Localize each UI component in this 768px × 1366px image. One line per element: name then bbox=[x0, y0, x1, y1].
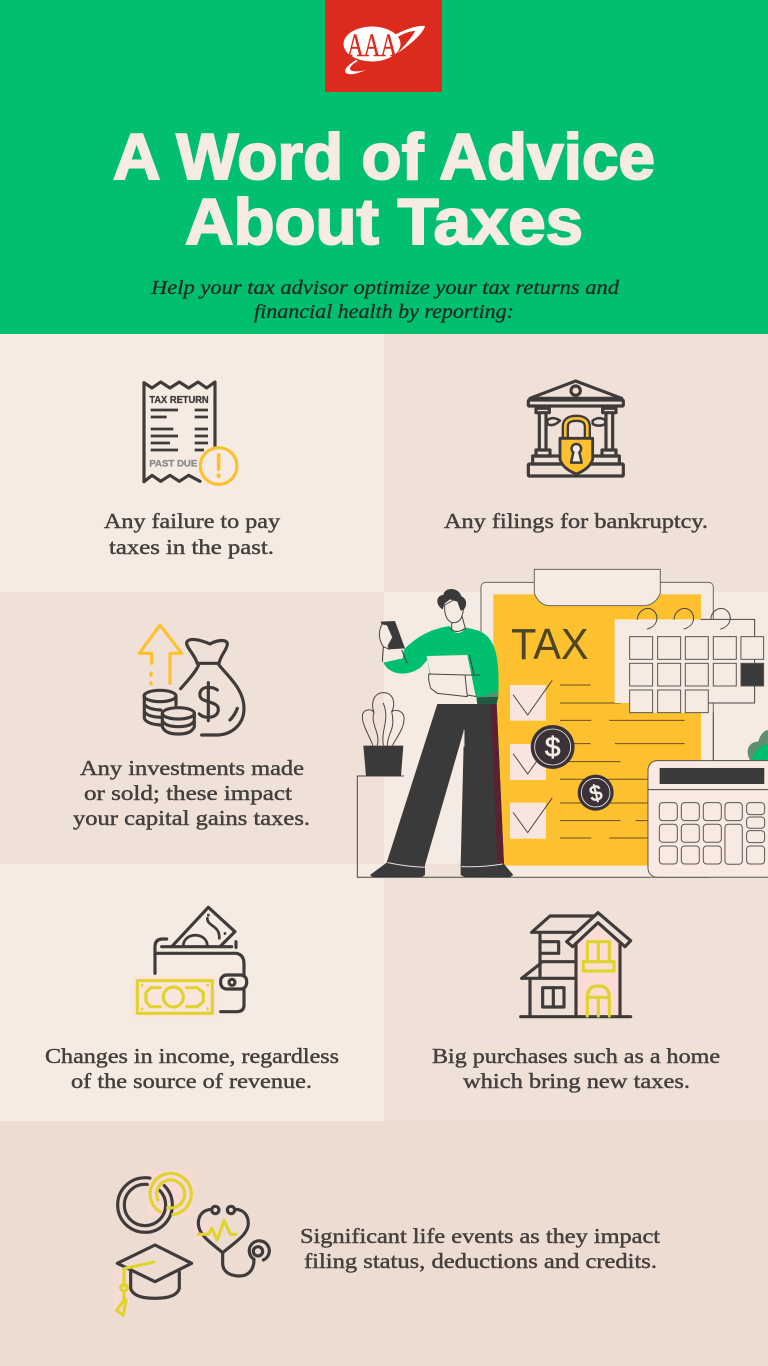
title: About Taxes bbox=[185, 185, 583, 258]
text: income: of the source of revenue. bbox=[71, 1069, 312, 1093]
text: purchases bbox=[432, 1044, 720, 1093]
text: failure to pay bbox=[104, 509, 281, 559]
text: purchases: Big purchases such as a home bbox=[432, 1044, 720, 1068]
text: life events: filing status, deductions and credits. bbox=[304, 1249, 657, 1273]
panel: bankruptcy bbox=[384, 334, 768, 592]
text: life events: Significant life events as they impact bbox=[300, 1224, 660, 1248]
text: life events bbox=[300, 1224, 660, 1273]
clipboard bbox=[481, 569, 713, 877]
text: failure to pay: Any failure to pay bbox=[104, 509, 281, 533]
text: investments bbox=[73, 756, 310, 830]
text: bankruptcy: Any filings for bankruptcy. bbox=[444, 509, 708, 533]
icon: tax return receipt: TAX RETURN bbox=[149, 395, 209, 406]
icon: tax return receipt bbox=[144, 382, 237, 484]
title: A Word of Advice bbox=[113, 120, 655, 193]
calculator bbox=[648, 761, 768, 877]
panel: illustration background bbox=[384, 592, 768, 864]
plant bbox=[362, 693, 404, 776]
icon: rings, stethoscope and graduation cap bbox=[106, 1166, 269, 1315]
text: income: Changes in income, regardless bbox=[45, 1044, 339, 1068]
heading: TAX: TAX bbox=[511, 620, 589, 669]
icon: tax return receipt: PAST DUE bbox=[149, 459, 197, 469]
text: investments: Any investments made bbox=[80, 756, 304, 780]
side table and floor line bbox=[357, 776, 650, 877]
text: failure to pay: taxes in the past. bbox=[109, 535, 274, 559]
checklist bbox=[510, 681, 685, 839]
icon: bank with padlock bbox=[528, 381, 623, 476]
coin: large: $ bbox=[545, 732, 561, 763]
text: purchases: which bring new taxes. bbox=[463, 1069, 690, 1093]
backing sheet and plant bbox=[713, 713, 768, 761]
subtitle bbox=[150, 277, 620, 323]
text: investments: your capital gains taxes. bbox=[73, 806, 310, 830]
AAA logo: AAA bbox=[347, 28, 397, 64]
coin: small: $ bbox=[587, 780, 605, 807]
coin: large bbox=[531, 725, 575, 769]
panel: past failure to pay bbox=[0, 334, 384, 592]
panel: life events bbox=[0, 1121, 768, 1366]
icon: house bbox=[521, 913, 631, 1017]
AAA logo bbox=[325, 0, 442, 92]
subtitle: Help your tax advisor optimize your tax returns and bbox=[150, 277, 620, 299]
panel: income bbox=[0, 864, 384, 1121]
title bbox=[113, 120, 655, 258]
subtitle: financial health by reporting: bbox=[254, 301, 514, 323]
text: income bbox=[45, 1044, 339, 1093]
calendar bbox=[615, 608, 764, 713]
text: investments: or sold; these impact bbox=[84, 781, 292, 805]
panel: investments bbox=[0, 592, 384, 864]
header panel bbox=[0, 0, 768, 334]
icon: money bag, coins and arrow bbox=[139, 625, 244, 735]
coin: small bbox=[578, 775, 614, 811]
man bbox=[370, 589, 513, 877]
panel: big purchases bbox=[384, 864, 768, 1121]
illustration: man with tax clipboard bbox=[357, 569, 768, 877]
icon: wallet and banknote bbox=[133, 907, 247, 1017]
